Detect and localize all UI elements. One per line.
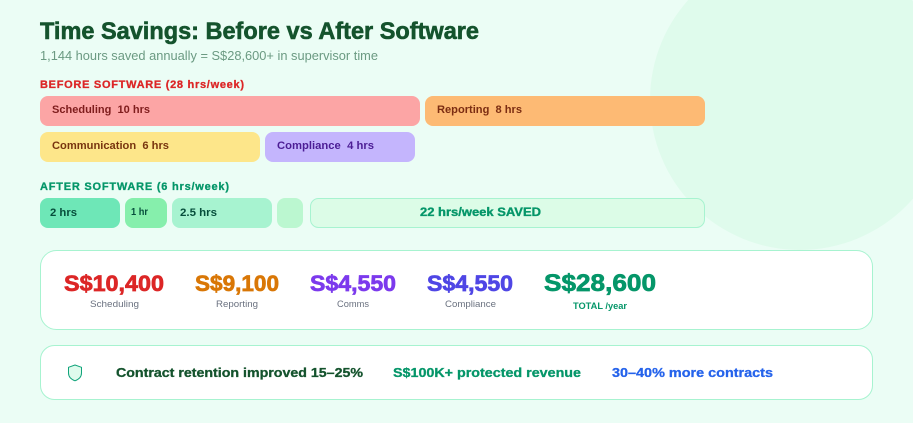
bar: unlabelled segment bbox=[277, 198, 303, 228]
title: Time Savings: Before vs After Software bbox=[40, 18, 479, 45]
bar: 2 hrs bbox=[40, 198, 120, 228]
bar: 2 hrs: 2 hrs bbox=[50, 207, 77, 219]
stat: total: TOTAL /year bbox=[573, 301, 627, 312]
bar: compliance bbox=[265, 132, 415, 162]
after software bars bbox=[40, 198, 704, 228]
bar: communication bbox=[40, 132, 260, 162]
after software heading: AFTER SOFTWARE (6 hrs/week) bbox=[40, 181, 229, 193]
stat: compliance: S$4,550 bbox=[427, 271, 513, 296]
outcome: protected revenue: S$100K+ protected revenue bbox=[393, 365, 581, 380]
bar: 1 hr bbox=[125, 198, 167, 228]
bar: communication: Communication 6 hrs bbox=[52, 140, 169, 152]
stat: scheduling: Scheduling bbox=[90, 299, 139, 310]
before software bars bbox=[40, 96, 705, 162]
bar: 2.5 hrs: 2.5 hrs bbox=[180, 207, 217, 219]
bar: 1 hr: 1 hr bbox=[131, 207, 148, 218]
bar: reporting bbox=[425, 96, 705, 126]
bar: 2.5 hrs bbox=[172, 198, 272, 228]
stat: total bbox=[544, 270, 656, 312]
stat: comms: S$4,550 bbox=[310, 271, 396, 296]
outcome: contract retention: Contract retention improved 15–25% bbox=[116, 365, 363, 380]
panel: annual savings bbox=[40, 250, 872, 330]
stat: comms bbox=[310, 271, 396, 310]
bar: scheduling: Scheduling 10 hrs bbox=[52, 104, 150, 116]
stat: reporting bbox=[195, 271, 279, 310]
bar: hours saved bbox=[310, 198, 704, 228]
stat: reporting: Reporting bbox=[216, 299, 258, 310]
before software heading: BEFORE SOFTWARE (28 hrs/week) bbox=[40, 79, 244, 91]
panel: outcomes bbox=[40, 346, 872, 400]
stat: compliance: Compliance bbox=[445, 299, 496, 310]
icon: shield bbox=[68, 365, 82, 381]
stat: reporting: S$9,100 bbox=[195, 271, 279, 296]
stat: total: S$28,600 bbox=[544, 270, 656, 297]
stat: scheduling bbox=[64, 271, 164, 310]
subtitle: 1,144 hours saved annually = S$28,600+ in supervisor time bbox=[40, 48, 378, 63]
bar: reporting: Reporting 8 hrs bbox=[437, 104, 522, 116]
stat: scheduling: S$10,400 bbox=[64, 271, 164, 296]
stat: comms: Comms bbox=[337, 299, 369, 310]
stat: compliance bbox=[427, 271, 513, 310]
outcome: more contracts: 30–40% more contracts bbox=[612, 365, 773, 380]
bar: compliance: Compliance 4 hrs bbox=[277, 140, 374, 152]
bar: hours saved: 22 hrs/week SAVED bbox=[420, 205, 541, 219]
bar: scheduling bbox=[40, 96, 420, 126]
